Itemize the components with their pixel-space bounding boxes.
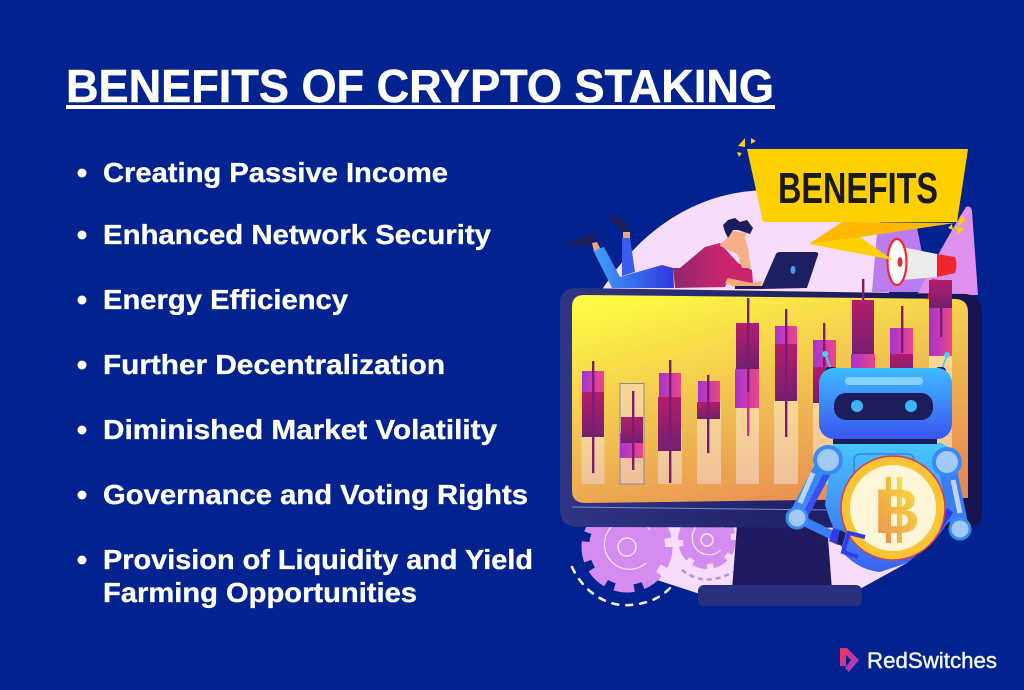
antennae — [825, 354, 947, 369]
legs — [622, 238, 635, 276]
redswitches logo: RedSwitches — [867, 648, 997, 673]
candle 7 — [813, 323, 836, 484]
bitcoin coin: B — [874, 477, 920, 547]
bullet: liquidity and yield farming: Provision of Liquidity and Yield — [103, 544, 533, 575]
illustration — [560, 138, 982, 606]
monitor stand — [732, 525, 832, 590]
robot — [787, 351, 970, 572]
dashed arc — [572, 567, 671, 605]
candle 8 — [851, 279, 875, 374]
bullet: energy efficiency: Energy Efficiency — [103, 284, 348, 315]
monitor screen — [572, 295, 968, 503]
benefits list — [78, 157, 533, 608]
bullet: enhanced network security: Enhanced Network Security — [103, 219, 491, 250]
claw — [829, 528, 842, 545]
coin bracket — [843, 533, 865, 557]
candle 5 — [735, 298, 759, 484]
bullet: creating passive income: Creating Passive Income — [103, 157, 448, 188]
candle 6 — [774, 309, 798, 484]
gear small — [681, 514, 733, 566]
title: BENEFITS OF CRYPTO STAKING — [66, 60, 774, 112]
candle 4 — [697, 375, 721, 484]
bullet: liquidity and yield farming: Farming Opportunities — [103, 577, 417, 608]
bullet: governance and voting rights: Governance and Voting Rights — [103, 479, 528, 510]
candle 2 — [620, 384, 644, 484]
monitor base — [698, 585, 862, 606]
laptop — [735, 252, 818, 289]
gear large — [586, 506, 668, 588]
benefits banner: BENEFITS — [778, 164, 938, 213]
arms — [797, 460, 828, 518]
candle 9 — [890, 306, 913, 374]
head — [819, 368, 952, 439]
pink backdrop blob — [575, 190, 935, 594]
candle 3 — [658, 360, 682, 484]
shoes — [569, 215, 630, 246]
gears — [572, 506, 733, 605]
body — [825, 443, 955, 572]
person with laptop — [569, 215, 818, 289]
bullet: further decentralization: Further Decentralization — [103, 349, 445, 380]
joints — [815, 447, 841, 473]
benefits banner — [737, 138, 968, 260]
candle 1 — [582, 361, 604, 484]
candle 10 — [929, 280, 952, 484]
purple spires — [872, 206, 978, 295]
hair — [723, 218, 753, 238]
bullet: diminished market volatility: Diminished Market Volatility — [103, 414, 497, 445]
bitcoin coin — [841, 456, 945, 560]
candlestick chart — [582, 279, 952, 484]
bullet: liquidity and yield farming — [78, 544, 533, 608]
torso — [673, 243, 753, 288]
face and arm — [720, 230, 751, 268]
logo icon — [840, 648, 859, 672]
monitor frame — [560, 288, 982, 528]
megaphone — [888, 239, 956, 300]
